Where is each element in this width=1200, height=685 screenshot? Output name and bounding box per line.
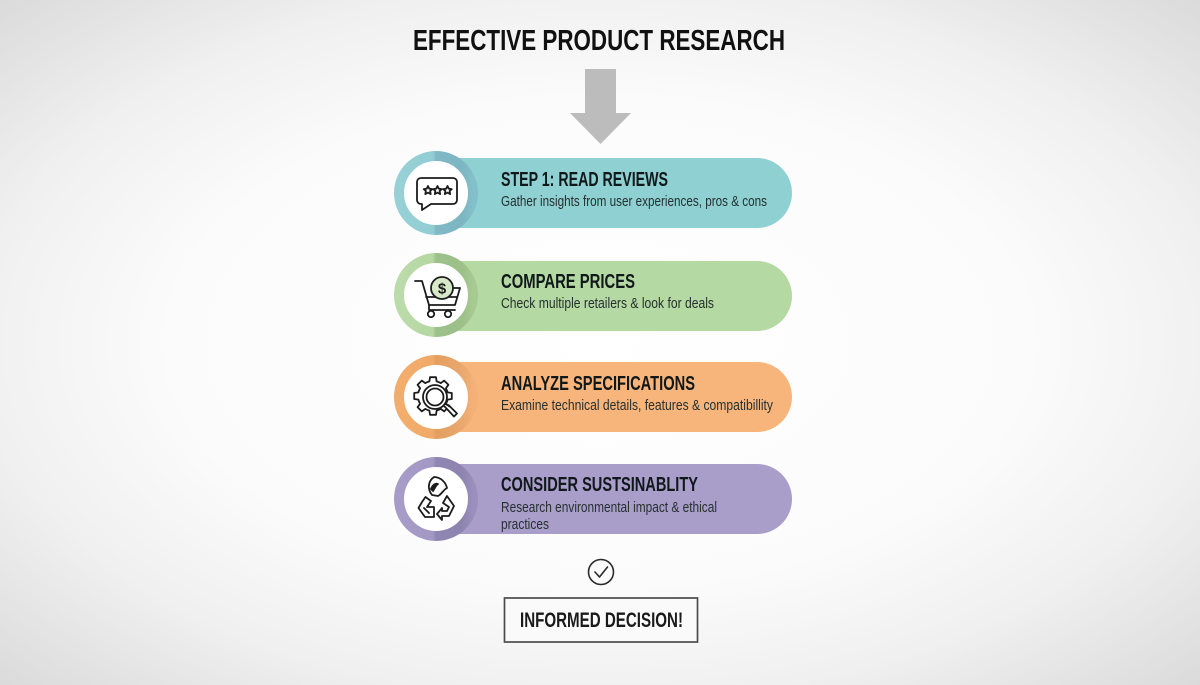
panel: step 1 read reviews <box>399 156 792 230</box>
arrow: down <box>570 69 631 144</box>
ring: analyze specifications <box>399 360 473 434</box>
callout: informed decision <box>504 598 698 642</box>
icon: speech bubble with stars <box>417 178 457 210</box>
text: consider sustainability description line 2: practices <box>501 517 549 533</box>
ring: step 1 <box>399 156 473 230</box>
icon: leaf with recycling arrows <box>418 477 454 520</box>
pill: step 1 <box>430 158 792 228</box>
text: consider sustainability description: Research environmental impact & ethical <box>501 500 717 516</box>
icon: shopping cart with dollar coin <box>415 277 460 317</box>
ring: compare prices <box>399 258 473 332</box>
pill: compare prices <box>430 261 792 331</box>
icon: check mark circle <box>588 560 614 584</box>
heading: compare prices: COMPARE PRICES <box>501 271 635 293</box>
callout text: INFORMED DECISION! <box>520 609 683 632</box>
title: EFFECTIVE PRODUCT RESEARCH <box>413 25 785 57</box>
text: step 1 description: Gather insights from user experiences, pros & cons <box>501 194 767 210</box>
pill: consider sustainability <box>430 464 792 534</box>
text: analyze specifications description: Examine technical details, features & compatibillity <box>501 398 774 414</box>
heading: consider sustainability: CONSIDER SUSTSINABLITY <box>501 474 698 496</box>
pill: analyze specifications <box>430 362 792 432</box>
icon: shopping cart with dollar coin: $ <box>438 280 447 298</box>
callout box <box>504 598 698 642</box>
panel: consider sustainability <box>399 462 792 536</box>
panel: compare prices <box>399 258 792 332</box>
heading: step 1: STEP 1: READ REVIEWS <box>501 169 668 191</box>
heading: analyze specifications: ANALYZE SPECIFICATIONS <box>501 373 695 395</box>
icon: gear with magnifier <box>414 377 457 416</box>
ring: consider sustainability <box>399 462 473 536</box>
text: compare prices description: Check multiple retailers & look for deals <box>501 296 714 312</box>
panel: analyze specifications <box>399 360 792 434</box>
